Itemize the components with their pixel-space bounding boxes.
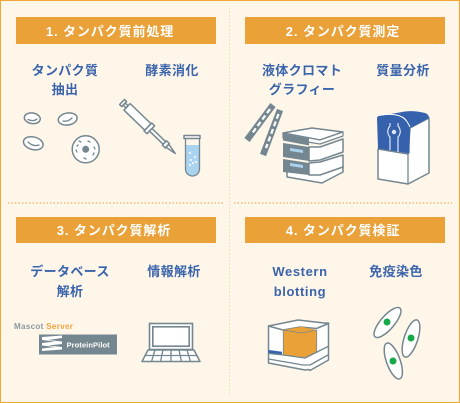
label: enzyme digestion: 酵素消化 xyxy=(145,63,199,78)
text: Mascot Server: Mascot Server xyxy=(14,322,73,331)
label: mass spectrometry: 質量分析 xyxy=(376,63,430,78)
heading: 1 protein preprocessing xyxy=(16,17,216,44)
icon: laptop xyxy=(142,324,200,362)
label: informatics: 情報解析 xyxy=(147,264,201,279)
label: liquid chromatography: グラフィー xyxy=(269,82,335,97)
icon: western blot apparatus xyxy=(268,320,328,370)
label: western blotting: blotting xyxy=(274,284,326,299)
icon: mass spectrometer xyxy=(377,111,429,184)
icon: chromatography columns xyxy=(247,105,280,155)
label: database analysis: 解析 xyxy=(57,284,83,299)
icon: LC stack xyxy=(283,128,343,183)
label: protein extraction: タンパク質 xyxy=(32,63,98,78)
label: protein extraction: 抽出 xyxy=(52,82,78,97)
icon: stained cells xyxy=(370,304,423,381)
label: liquid chromatography: 液体クロマト xyxy=(262,63,342,78)
heading: 4 protein verification: 4. タンパク質検証 xyxy=(286,223,400,238)
label: immunostaining: 免疫染色 xyxy=(369,264,423,279)
logo: ProteinPilot: ProteinPilot xyxy=(66,340,110,350)
label: liquid chromatography xyxy=(262,63,342,97)
heading: 2 protein measurement xyxy=(245,17,445,44)
logo: ProteinPilot xyxy=(39,334,117,354)
heading: 3 protein analysis xyxy=(16,217,216,243)
label: western blotting: Western xyxy=(272,264,328,279)
icon: test tube xyxy=(184,136,200,176)
label: database analysis xyxy=(30,264,110,299)
heading: 3 protein analysis: 3. タンパク質解析 xyxy=(57,223,171,238)
icon: pipette xyxy=(118,98,179,157)
heading: 2 protein measurement: 2. タンパク質測定 xyxy=(286,24,400,39)
label: western blotting xyxy=(272,264,328,299)
label: protein extraction xyxy=(32,63,98,97)
icon: cells xyxy=(22,111,99,163)
heading: 1 protein preprocessing: 1. タンパク質前処理 xyxy=(46,24,174,39)
heading: 4 protein verification xyxy=(245,217,445,243)
label: database analysis: データベース xyxy=(30,264,110,279)
